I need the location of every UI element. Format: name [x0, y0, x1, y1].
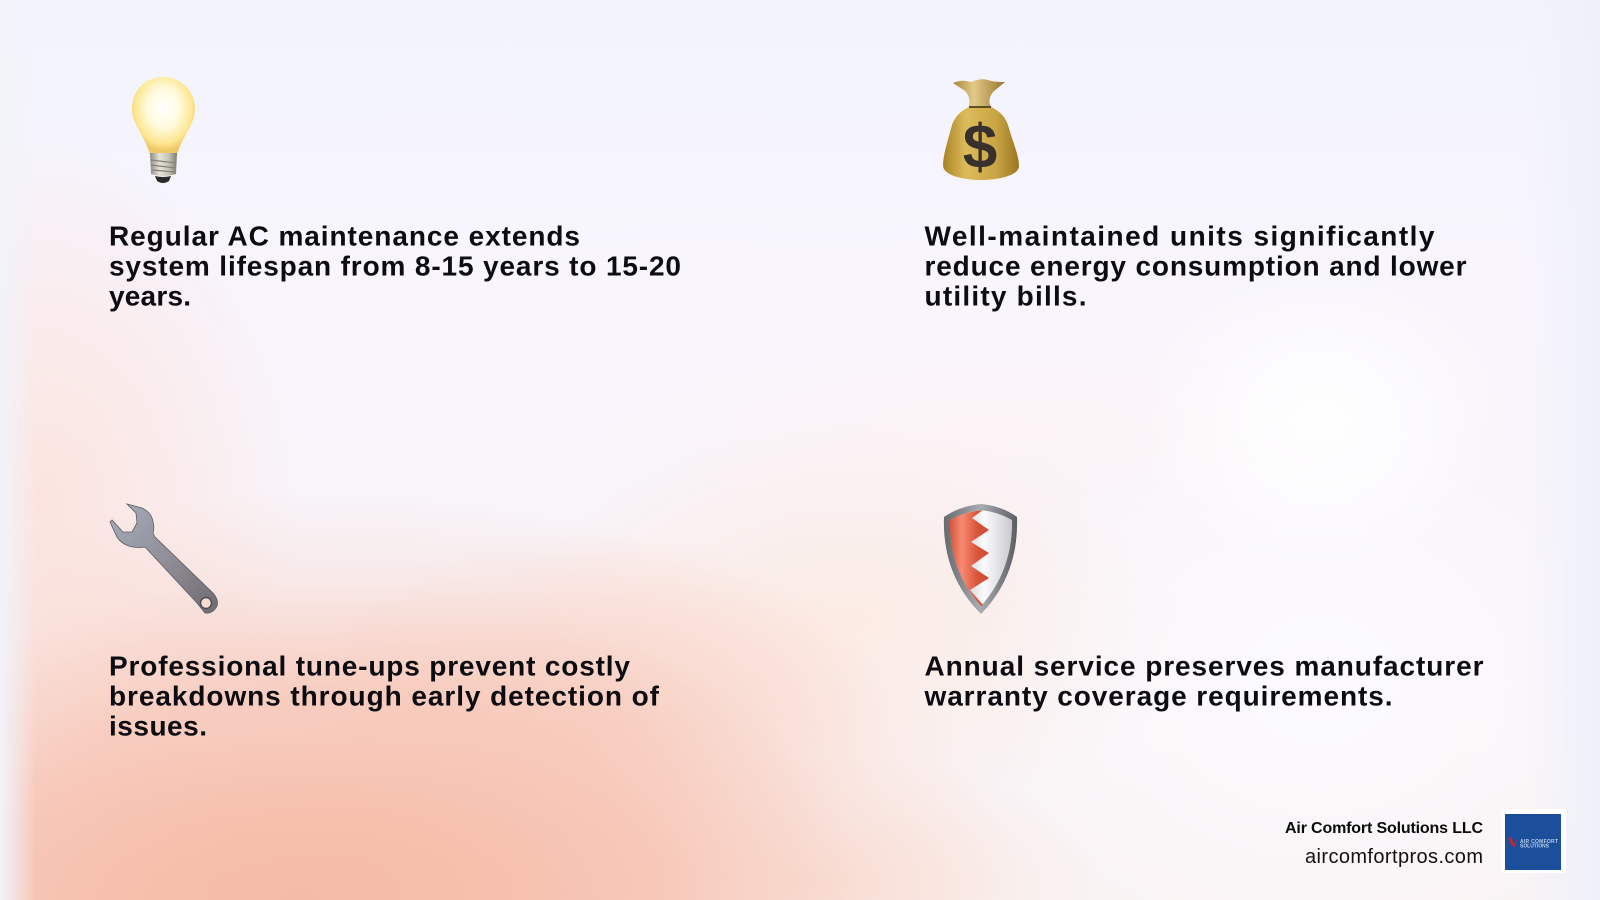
text: lifespan: years.: [109, 280, 191, 312]
text: tune-ups: [109, 650, 660, 742]
panel: energy savings: [924, 79, 1467, 311]
panel: warranty: [924, 504, 1484, 712]
footer: brand: [1285, 809, 1566, 873]
text: warranty: warranty coverage requirements.: [924, 680, 1392, 712]
text: lifespan: Regular AC maintenance extends: [109, 220, 580, 252]
text: tune-ups: issues.: [109, 710, 207, 742]
website: aircomfortpros.com: [1305, 846, 1483, 868]
text: tune-ups: breakdowns through early detection of: [109, 680, 660, 712]
text: energy: Well-maintained units significantly: [924, 220, 1435, 252]
icon: money bag: [943, 79, 1019, 182]
brand name: Air Comfort Solutions LLC: [1285, 820, 1483, 837]
text: energy: reduce energy consumption and lower: [924, 250, 1467, 282]
text: lifespan: [109, 220, 681, 312]
logo: AIR COMFORT: [1520, 839, 1558, 845]
icon: wrench: [110, 504, 218, 613]
text: lifespan: system lifespan from 8-15 years to 15-20: [109, 250, 681, 282]
panel: system lifespan: [109, 77, 681, 312]
icon: shield: [944, 504, 1017, 614]
text: energy: [924, 220, 1467, 312]
logo: SOLUTIONS: [1520, 844, 1550, 850]
text: warranty: Annual service preserves manufacturer: [924, 650, 1484, 682]
text: warranty: [924, 650, 1484, 712]
icon: light bulb: [132, 77, 195, 183]
text: tune-ups: Professional tune-ups prevent costly: [109, 650, 630, 682]
text: energy: utility bills.: [924, 280, 1086, 312]
icon: money bag: $: [963, 113, 997, 182]
logo: [1501, 809, 1566, 873]
panel: tune-ups: [109, 504, 660, 742]
